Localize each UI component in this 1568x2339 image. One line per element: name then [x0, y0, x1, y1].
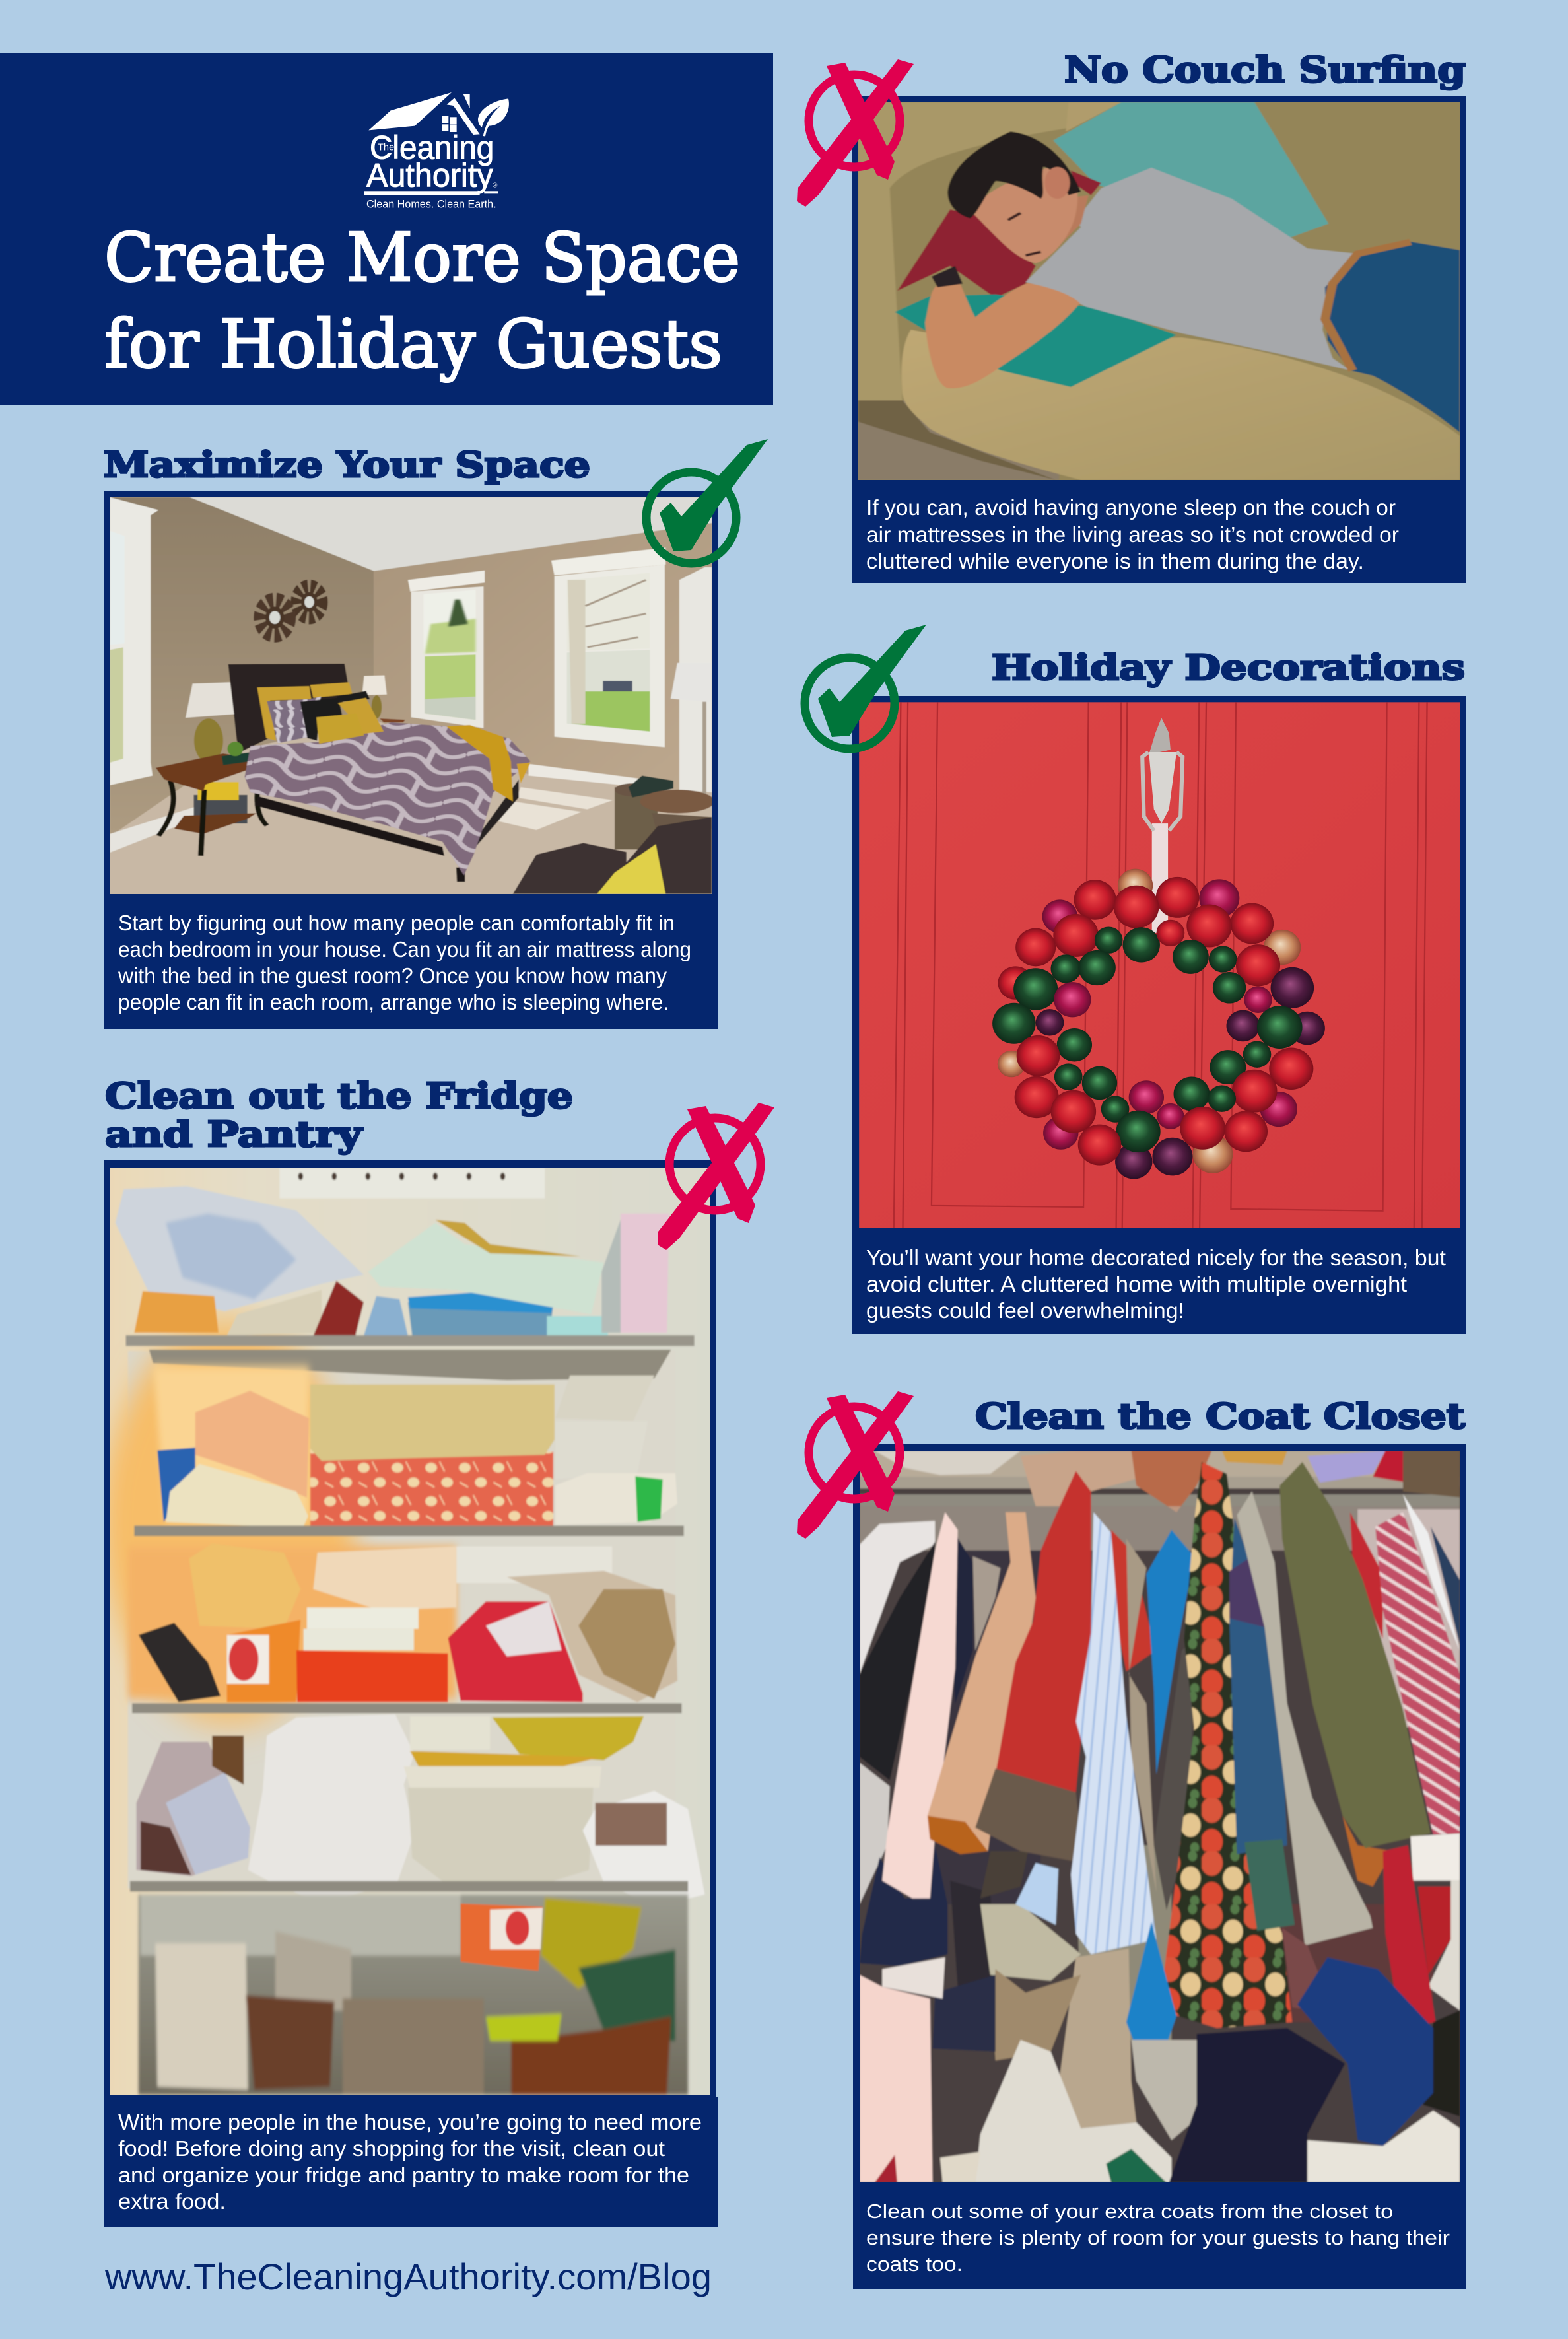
title	[104, 219, 740, 383]
heading: fridge and pantry	[105, 1076, 573, 1155]
heading: clean the coat closet: Clean the Coat Closet	[975, 1397, 1465, 1437]
caption: clean the coat closet: coats too.	[866, 2252, 963, 2276]
frame and caption background	[852, 96, 1466, 583]
caption background	[104, 2097, 718, 2227]
header panel	[0, 53, 773, 405]
caption: no couch surfing	[866, 495, 1399, 573]
logo: The Cleaning Authority	[364, 92, 509, 210]
caption: fridge and pantry	[118, 2110, 702, 2214]
logo: The Cleaning Authority: ®	[493, 182, 498, 189]
panel: clean out the fridge and pantry	[86, 1076, 774, 2227]
website url: www.TheCleaningAuthority.com/Blog	[104, 2256, 712, 2297]
caption: fridge and pantry: and organize your fridge and pantry to make room for the	[118, 2163, 689, 2187]
panel: clean the coat closet	[797, 1391, 1466, 2289]
wreath of baubles	[992, 869, 1325, 1179]
title: for Holiday Guests	[104, 305, 722, 383]
photo: bedroom	[106, 492, 720, 898]
icon: red x	[797, 1391, 914, 1539]
caption: holiday decorations: You’ll want your home decorated nicely for the season, but	[866, 1245, 1446, 1270]
caption: fridge and pantry: With more people in the house, you’re going to need more	[118, 2110, 702, 2134]
icon: red x	[658, 1103, 774, 1250]
panel: holiday decorations	[805, 625, 1466, 1334]
caption: no couch surfing: air mattresses in the living areas so it’s not crowded or	[866, 522, 1399, 547]
heading: fridge and pantry: and Pantry	[105, 1114, 364, 1155]
panel: no couch surfing	[797, 54, 1466, 583]
logo: The Cleaning Authority: The	[378, 142, 394, 153]
title: Create More Space	[104, 219, 740, 297]
frame and caption background	[852, 696, 1466, 1334]
heading: holiday decorations: Holiday Decorations	[992, 648, 1465, 688]
caption: holiday decorations: guests could feel overwhelming!	[866, 1298, 1184, 1323]
photo: messy fridge	[110, 1168, 710, 2095]
heading: maximize your space: Maximize Your Space	[104, 444, 590, 485]
caption: maximize your space: with the bed in the guest room? Once you know how many	[118, 963, 667, 988]
icon: green check	[646, 439, 768, 563]
heading: fridge and pantry: Clean out the Fridge	[105, 1076, 573, 1117]
frame and caption background	[853, 1444, 1466, 2289]
filler fabrics	[930, 1551, 1040, 1904]
caption: maximize your space: Start by figuring out how many people can comfortably fit in	[118, 911, 675, 935]
icon: red x	[797, 59, 914, 207]
caption: maximize your space	[118, 911, 691, 1014]
photo: red door with wreath	[859, 702, 1460, 1228]
caption: holiday decorations	[866, 1245, 1446, 1323]
caption: clean the coat closet: Clean out some of your extra coats from the closet to	[866, 2200, 1393, 2223]
logo: The Cleaning Authority: Clean Homes. Clean Earth.	[366, 197, 496, 210]
caption: holiday decorations: avoid clutter. A cluttered home with multiple overnight	[866, 1272, 1407, 1296]
wreath hanger	[1142, 718, 1182, 933]
logo: The Cleaning Authority: Cleaning	[370, 129, 494, 166]
caption: maximize your space: each bedroom in your house. Can you fit an air mattress along	[118, 937, 691, 961]
logo: The Cleaning Authority: Authority	[366, 157, 493, 194]
caption: clean the coat closet: ensure there is plenty of room for your guests to hang their	[866, 2226, 1450, 2249]
photo: crowded closet	[860, 1451, 1460, 2182]
caption: maximize your space: people can fit in each room, arrange who is sleeping where.	[118, 990, 669, 1014]
frame and caption background	[104, 491, 718, 1029]
panel: maximize your space	[104, 439, 768, 1029]
icon: green check	[805, 625, 926, 749]
caption: no couch surfing: cluttered while everyone is in them during the day.	[866, 549, 1364, 573]
frame	[104, 1160, 716, 2098]
heading: no couch surfing: No Couch Surfing	[1064, 50, 1466, 90]
caption: fridge and pantry: extra food.	[118, 2189, 226, 2214]
caption: clean the coat closet	[866, 2200, 1450, 2276]
caption: fridge and pantry: food! Before doing any shopping for the visit, clean out	[118, 2136, 665, 2161]
caption: no couch surfing: If you can, avoid having anyone sleep on the couch or	[866, 495, 1396, 520]
photo: man asleep on couch	[858, 102, 1460, 480]
